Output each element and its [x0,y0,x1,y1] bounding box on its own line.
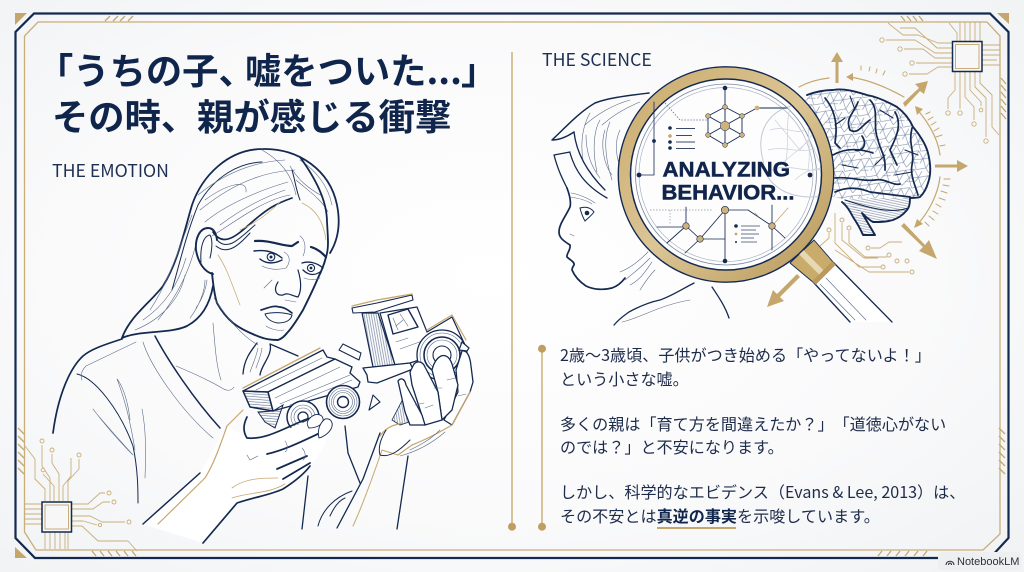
ghost brain inside lens [760,106,821,198]
magnifying glass handle [790,240,892,322]
icon: chip [42,502,72,532]
icon: chip [952,42,982,72]
text: analyzing behavior: BEHAVIOR... [662,180,794,204]
paragraph 1: 2歳〜3歳頃、子供がつき始める「やってないよ！」 [560,342,931,366]
text: analyzing behavior [662,157,794,204]
paragraph 3: その不安とは真逆の事実を示唆しています。 [560,503,880,527]
toy truck front half [352,294,469,383]
data list bottom [734,224,760,243]
heading: the emotion: THE EMOTION [52,157,169,183]
title [37,43,497,141]
illustration: brain [795,89,930,235]
illustration: child profile [552,93,729,325]
data list top [668,126,695,150]
left bracket and side nodes [637,102,812,177]
paragraph 2 [560,411,946,458]
magnifying glass lens [618,67,835,282]
timeline for body text [538,345,546,531]
paragraph 2: 多くの親は「育て方を間違えたか？」「道徳心がない [560,411,946,435]
paragraph 3: しかし、科学的なエビデンス（Evans & Lee, 2013）は、 [560,479,965,503]
ear [196,228,217,274]
fingers [398,351,473,425]
network diagram [665,86,787,147]
line chart [650,205,788,263]
debris [339,344,380,410]
title: その時、親が感じる衝撃 [52,89,451,141]
hair [122,149,339,338]
nose and mouth [261,270,301,330]
highlight underline [657,527,736,529]
circuit: top right [876,22,1000,143]
face contour [212,257,326,340]
title: 」 [461,43,497,95]
heading: the science: THE SCIENCE [542,46,652,72]
paragraph 1 [560,342,931,390]
circuit: bottom left [25,439,137,551]
eyes and brows [254,236,326,280]
icon: notebooklm logo [946,561,954,565]
watermark: NotebookLM [938,552,1021,570]
paragraph 3 [560,479,965,527]
text: analyzing behavior: ANALYZING [662,157,790,181]
divider line [511,52,513,526]
watermark: NotebookLM: NotebookLM [957,556,1019,568]
body text [560,342,965,528]
left hand [143,410,332,543]
circuit: under brain [820,213,914,274]
title: 嘘をついた... [245,43,462,95]
right hand [353,351,473,526]
divider end dot [508,523,516,531]
illustration: worried mother [53,149,473,543]
torso and clothing [53,298,408,529]
gold analysis arrows [767,52,968,307]
toy truck rear half [243,348,360,433]
paragraph 1: という小さな嘘。 [560,366,689,390]
title: 「うちの子、 [37,43,255,95]
paragraph 2: のでは？」と不安になります。 [560,434,784,458]
